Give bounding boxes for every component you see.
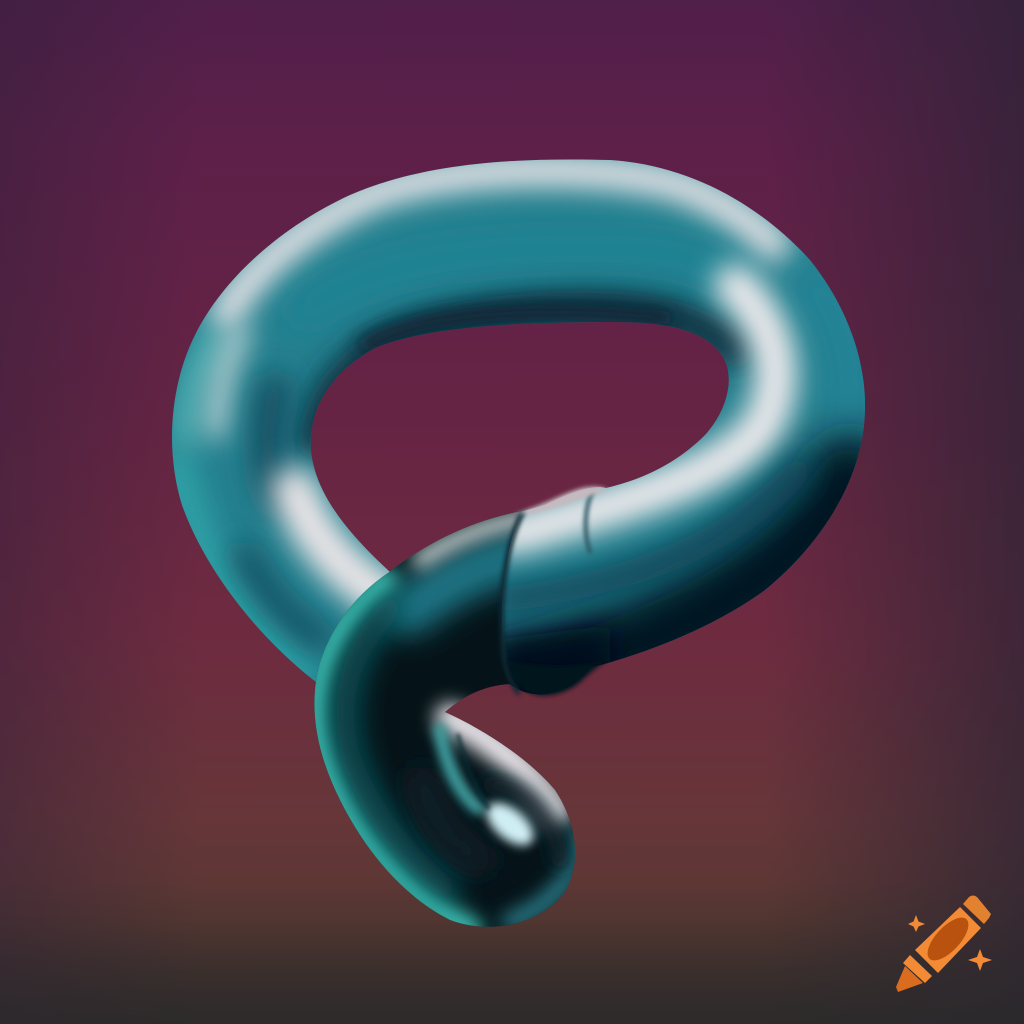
bulb shadow above highlight — [490, 785, 560, 860]
lower left pale band — [295, 490, 390, 600]
hook front section — [314, 511, 575, 927]
bulb inner teal — [440, 730, 478, 808]
under-arch dark — [365, 312, 665, 345]
crayon oval label — [921, 911, 975, 967]
bulb pale top — [450, 718, 556, 812]
top band — [305, 249, 730, 310]
sparkle large — [968, 949, 992, 971]
right pale band — [510, 285, 776, 535]
right outer teal — [815, 285, 849, 440]
left teal outer — [178, 470, 300, 670]
lower dim interior — [422, 780, 480, 860]
crayon body — [915, 907, 981, 973]
lower left dark — [245, 555, 320, 640]
bulb crease — [458, 735, 488, 808]
left streak — [216, 335, 240, 430]
icon: crayon logo — [896, 896, 992, 992]
crayon tip band — [903, 955, 932, 983]
outer top highlight — [225, 170, 775, 315]
left dim inner — [268, 390, 280, 500]
bulb rim — [510, 835, 578, 922]
inner shadow top — [315, 309, 735, 440]
looped tube — [172, 160, 866, 927]
teal outer edge — [316, 580, 470, 930]
collar dark underside — [503, 610, 618, 694]
bulb highlight — [479, 795, 541, 853]
bottom dark — [500, 480, 850, 690]
crayon cap — [963, 896, 991, 924]
collar grooves — [502, 512, 523, 692]
collar bulge — [508, 660, 606, 695]
upper pale edge — [420, 518, 525, 560]
sparkle small — [908, 915, 925, 932]
upper body teal — [410, 555, 520, 610]
tube ring body — [172, 160, 866, 694]
crayon tip — [896, 966, 923, 992]
collar top ridge — [515, 487, 608, 514]
